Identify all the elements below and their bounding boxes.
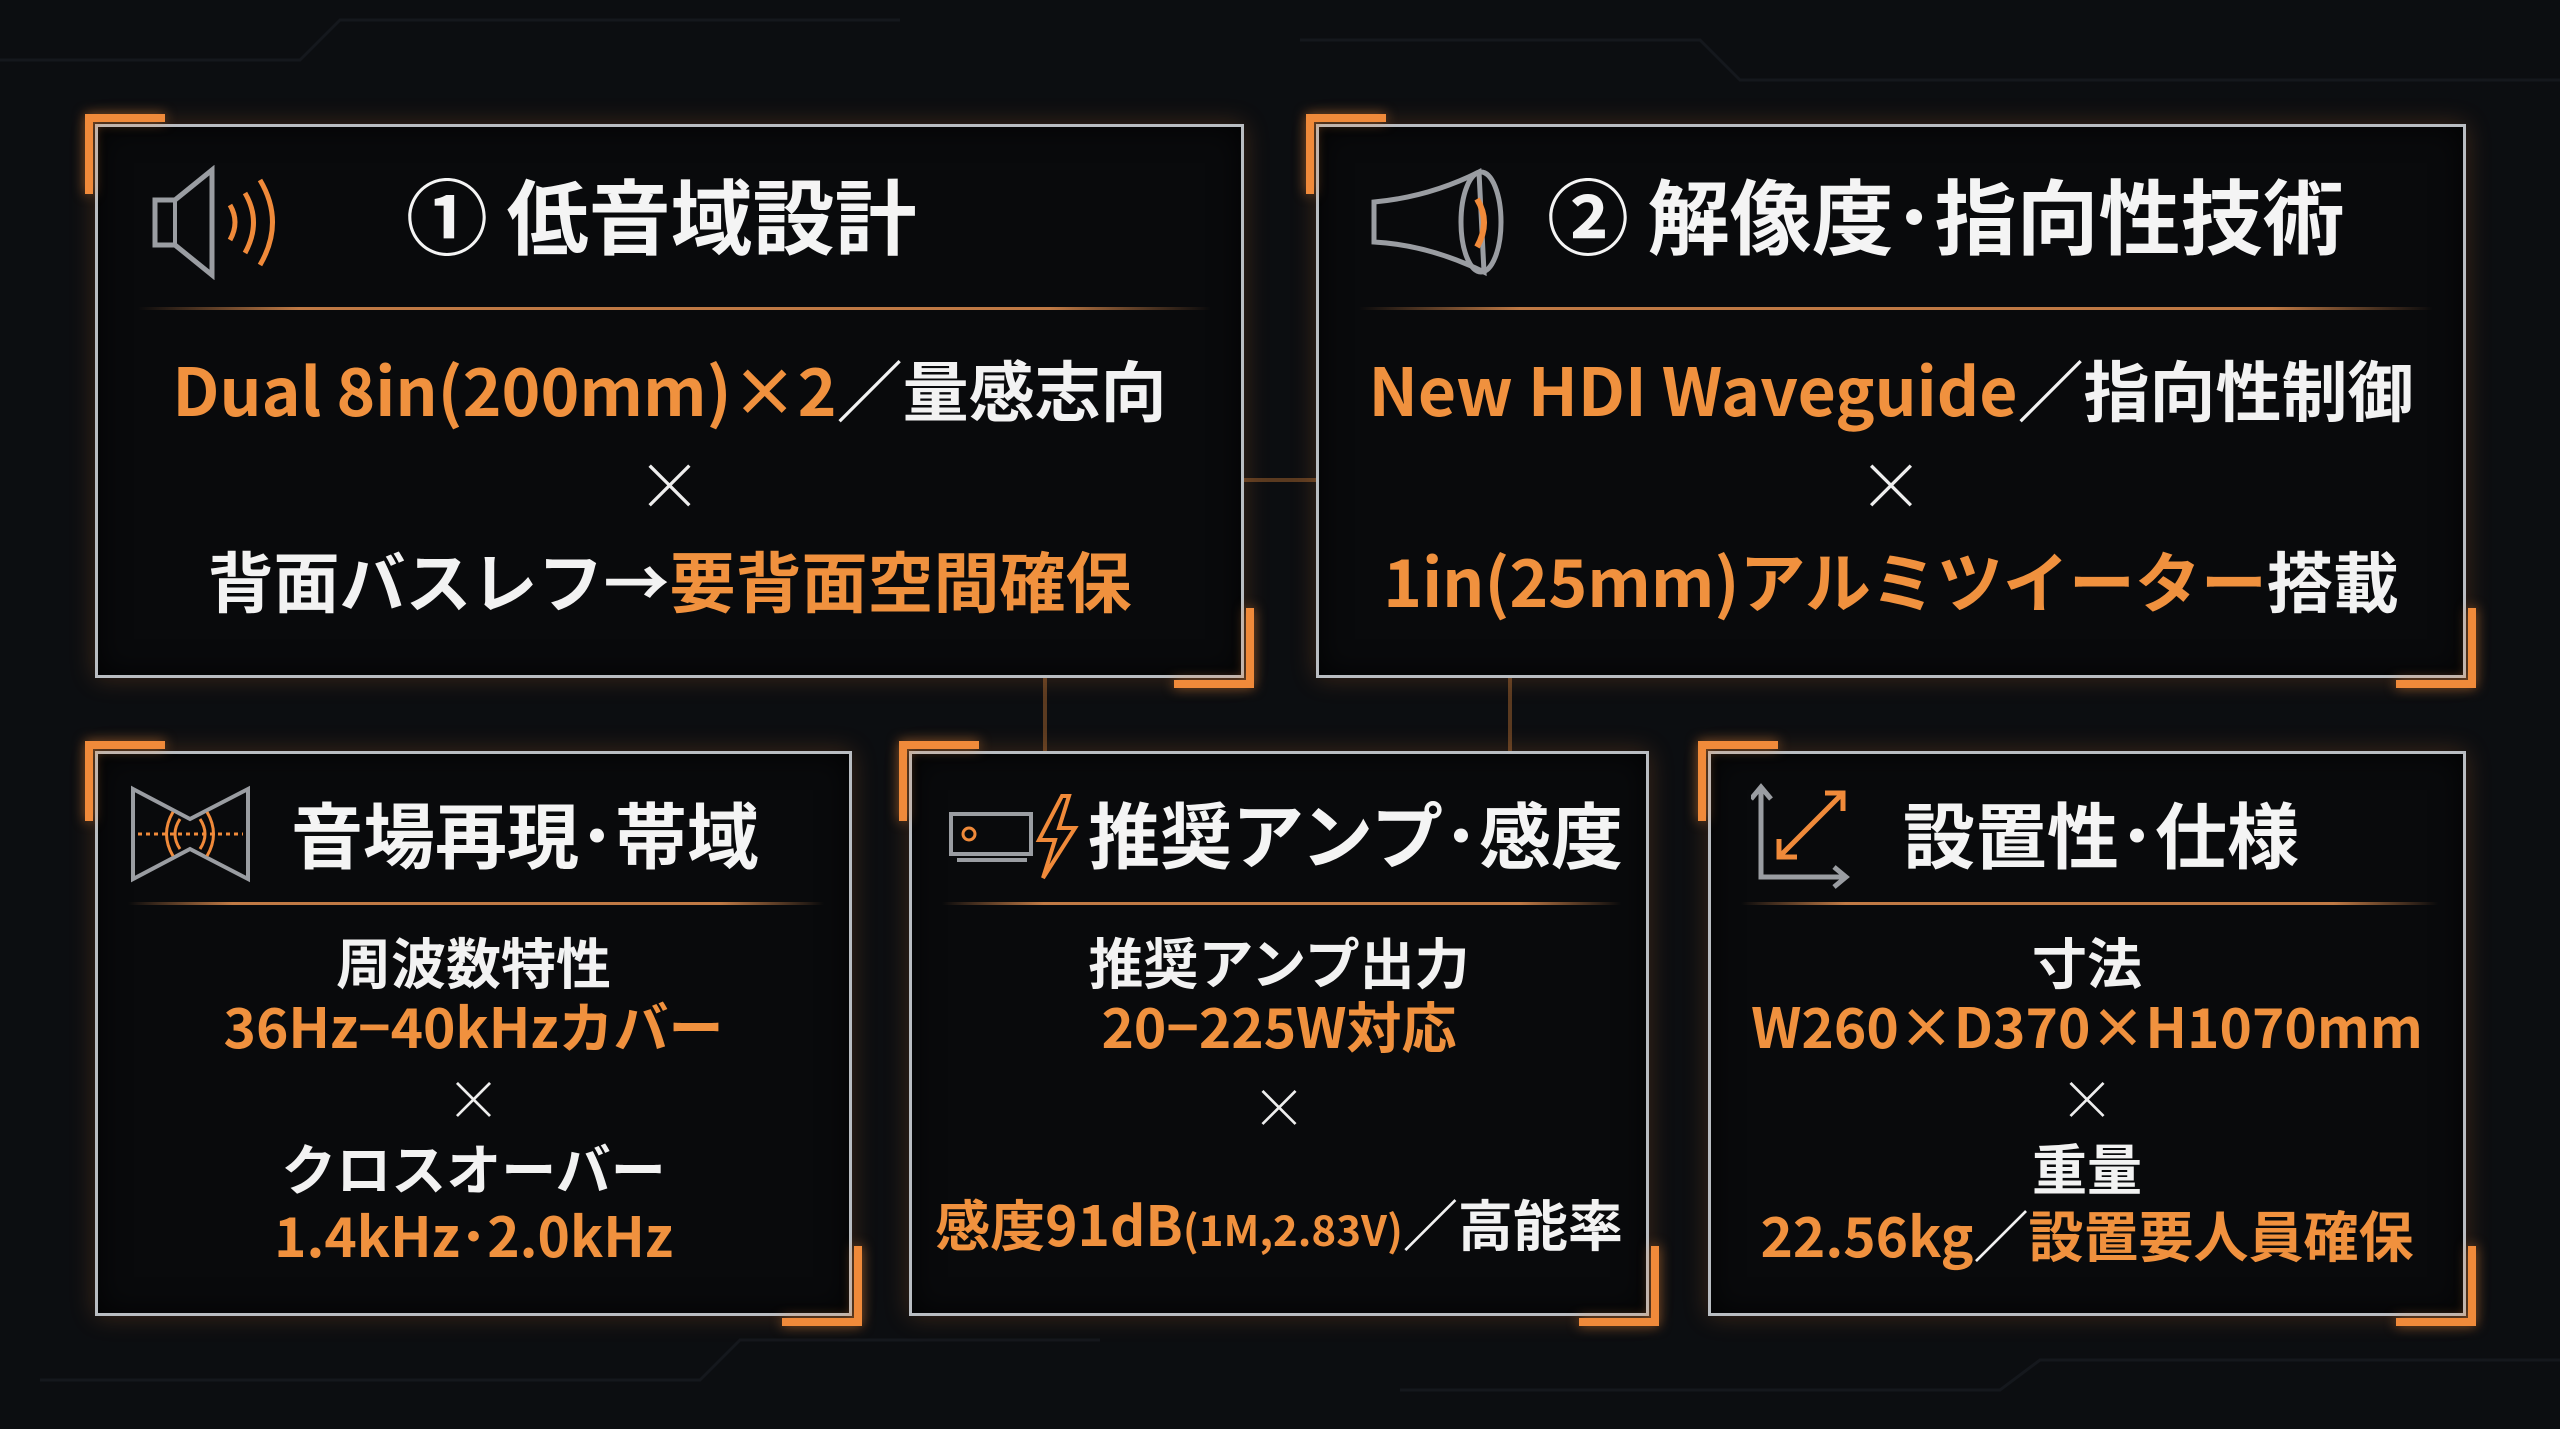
panel: recommended amp / sensitivity: 20−225W対応 xyxy=(1101,984,1457,1064)
panel: soundstage / band: クロスオーバー xyxy=(281,1126,666,1206)
panel: installation / specs: W260×D370×H1070mm xyxy=(1751,984,2423,1064)
panel: low frequency design: × xyxy=(636,434,702,530)
panel: resolution / directivity: 1in(25mm)アルミツイーター搭載 xyxy=(1383,531,2399,627)
text block: 周波数特性 xyxy=(336,920,611,1000)
panel: installation / specs: 22.56kg／設置要人員確保 xyxy=(1760,1193,2414,1273)
icon: speaker xyxy=(152,165,276,280)
icon: dimensions arrows xyxy=(1751,783,1850,889)
icon: soundstage xyxy=(131,786,250,882)
panel: resolution / directivity: × xyxy=(1858,434,1924,530)
heading: 推奨アンプ･感度 xyxy=(1088,779,1623,884)
icon: amp with lightning xyxy=(949,794,1079,880)
text block: 推奨アンプ出力 xyxy=(1088,920,1470,1000)
panel: recommended amp / sensitivity: × xyxy=(1251,1064,1306,1144)
heading: 音場再現･帯域 xyxy=(291,779,759,884)
panel: soundstage / band: × xyxy=(446,1056,501,1136)
text block: New HDI Waveguide／指向性制御 xyxy=(1368,340,2414,436)
panel: soundstage / band: 1.4kHz･2.0kHz xyxy=(274,1193,673,1273)
panel: resolution / directivity xyxy=(1316,124,2466,678)
text block: 寸法 xyxy=(2032,920,2142,1000)
heading: ① 低音域設計 xyxy=(406,153,917,272)
panel: recommended amp / sensitivity xyxy=(909,751,1649,1316)
panel: soundstage / band xyxy=(95,751,852,1316)
heading: ② 解像度･指向性技術 xyxy=(1547,153,2345,272)
panel: low frequency design xyxy=(95,124,1244,678)
panel: soundstage / band: 36Hz−40kHzカバー xyxy=(224,984,723,1064)
panel: recommended amp / sensitivity: 感度91dB(1M,2.83V)／高能率 xyxy=(935,1182,1623,1262)
panel: installation / specs xyxy=(1708,751,2466,1316)
text block: Dual 8in(200mm)×2／量感志向 xyxy=(172,340,1167,436)
icon: horn xyxy=(1372,168,1504,276)
panel: installation / specs: 重量 xyxy=(2032,1126,2142,1206)
panel: low frequency design: 背面バスレフ→要背面空間確保 xyxy=(208,531,1132,627)
panel: installation / specs: × xyxy=(2059,1056,2114,1136)
heading: 設置性･仕様 xyxy=(1903,779,2299,884)
